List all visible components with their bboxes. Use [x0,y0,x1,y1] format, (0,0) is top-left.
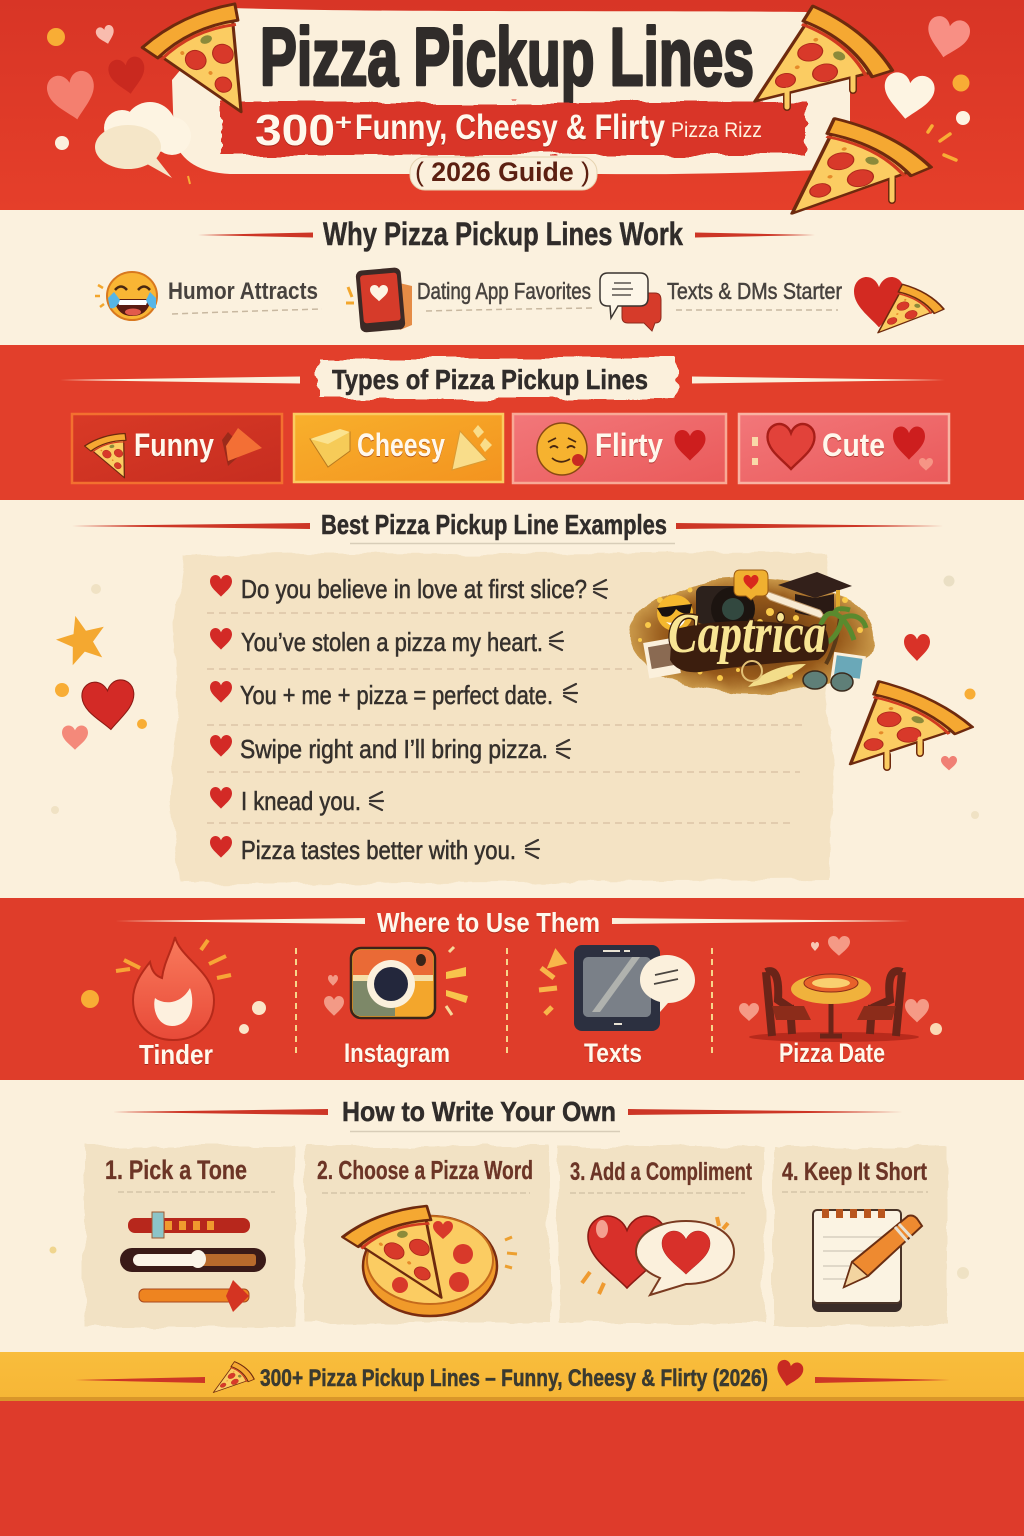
logo wordmark: Captrica [668,603,826,665]
label: texts and DMs starter: Texts & DMs Starter [667,278,842,304]
icon: heart [774,1359,805,1389]
icon: palm [820,609,866,664]
icon: heart and speech bubble [582,1216,734,1295]
icon: notepad and pencil [812,1209,922,1312]
item: instagram [324,947,468,1068]
heading rules [60,376,945,384]
list item 3: You + me + pizza = perfect date. [240,680,553,710]
step card 3: 3. Add a Compliment [570,1158,752,1186]
label: dating app favorites: Dating App Favorites [417,278,591,304]
card: flirty: Flirty [595,427,663,463]
icon: heart and slice [854,277,947,345]
card: funny [72,414,282,484]
year pill: ( 2026 Guide ) [415,157,590,187]
column dividers [296,948,712,1058]
gold sparkles [638,588,863,685]
decorations left [51,584,147,814]
step card 4 [773,1146,947,1325]
label: humor attracts: Humor Attracts [168,278,318,305]
item: instagram: Instagram [344,1038,450,1068]
icon: graduation cap [778,572,852,616]
heading ribbon [318,358,676,399]
icon: whole pizza with slice [339,1201,517,1316]
step card 4: 4. Keep It Short [782,1158,928,1186]
icon: heart bubble [734,570,768,600]
subtitle ribbon: Funny, Cheesy & Flirty [355,108,665,147]
pizza slice lower right [744,114,937,238]
heading rules [113,1109,903,1115]
decorations right [804,576,979,819]
hearts and dots right [880,14,972,160]
item: pizza date: Pizza Date [779,1038,885,1068]
step card 2: 2. Choose a Pizza Word [317,1155,533,1185]
title card [172,8,850,174]
card: cheesy [294,414,503,482]
panel: why pizza pickup lines work [95,216,947,345]
icon: tone sliders [120,1212,266,1312]
speech cloud [95,102,191,184]
icon: camera [696,586,755,631]
icon: slice [204,1360,256,1401]
item: texts [539,945,695,1068]
heading rules [198,232,815,238]
item: pizza date [739,936,942,1068]
card: cheesy: Cheesy [357,427,445,463]
list dividers [207,613,803,823]
heading: How to Write Your Own [342,1096,616,1127]
pizza slice top right [715,2,899,133]
step card 1: 1. Pick a Tone [105,1155,247,1185]
icon: laughing emoji [95,272,157,320]
pizza slice left [139,0,287,134]
list item 2: You’ve stolen a pizza my heart. [241,627,543,657]
subtitle ribbon: 300 [255,106,335,155]
item: texts: Texts [584,1038,642,1068]
icon: photos [643,637,866,686]
card: flirty [513,414,726,483]
icon: chat bubbles [600,273,661,331]
label: humor attracts [168,278,322,314]
heading: Types of Pizza Pickup Lines [332,364,648,395]
logo: Captrica badge [630,570,874,694]
icon: phone with heart [346,267,412,333]
item: tinder [81,937,266,1070]
panel: where to use them [81,907,942,1070]
heading: Best Pizza Pickup Line Examples [321,509,667,540]
footer banner [0,1352,1024,1401]
heading: Where to Use Them [377,907,600,938]
card: funny: Funny [134,427,214,463]
step card 1 [84,1146,295,1327]
subtitle ribbon [222,102,806,155]
card: cute [739,414,949,483]
sunglasses and feather [742,661,853,691]
icon: diploma [766,592,823,618]
hearts and dots left [45,24,149,150]
panel: how to write your own [50,1096,969,1327]
list item 6: Pizza tastes better with you. [241,835,516,865]
panel: best pizza pickup line examples [51,509,979,884]
card: cute: Cute [822,427,885,463]
step card 2 [305,1146,549,1323]
icon: sunglasses emoji [657,595,693,631]
item: tinder: Tinder [139,1039,213,1070]
list item 4: Swipe right and I’ll bring pizza. [240,734,548,764]
heading: Why Pizza Pickup Lines Work [323,216,683,252]
subtitle ribbon: + [335,110,352,135]
panel: header banner [45,0,972,238]
panel: types of pizza pickup lines [60,358,949,484]
heading rules [72,523,943,529]
step card 3 [558,1146,764,1323]
small dots [50,1246,969,1279]
footer text: 300+ Pizza Pickup Lines – Funny, Cheesy & Flirty (2026) [260,1365,768,1392]
list item 5: I knead you. [241,786,361,816]
icon: kissing emoji [537,423,587,475]
title: Pizza Pickup Lines [260,12,754,103]
label: dating app favorites [417,278,592,311]
logo ribbon [670,621,829,672]
heading rules [115,918,910,924]
subtitle ribbon: Pizza Rizz [671,119,762,142]
parchment list panel [170,553,835,884]
footer rules [75,1377,950,1383]
list item 1: Do you believe in love at first slice? [241,574,587,604]
